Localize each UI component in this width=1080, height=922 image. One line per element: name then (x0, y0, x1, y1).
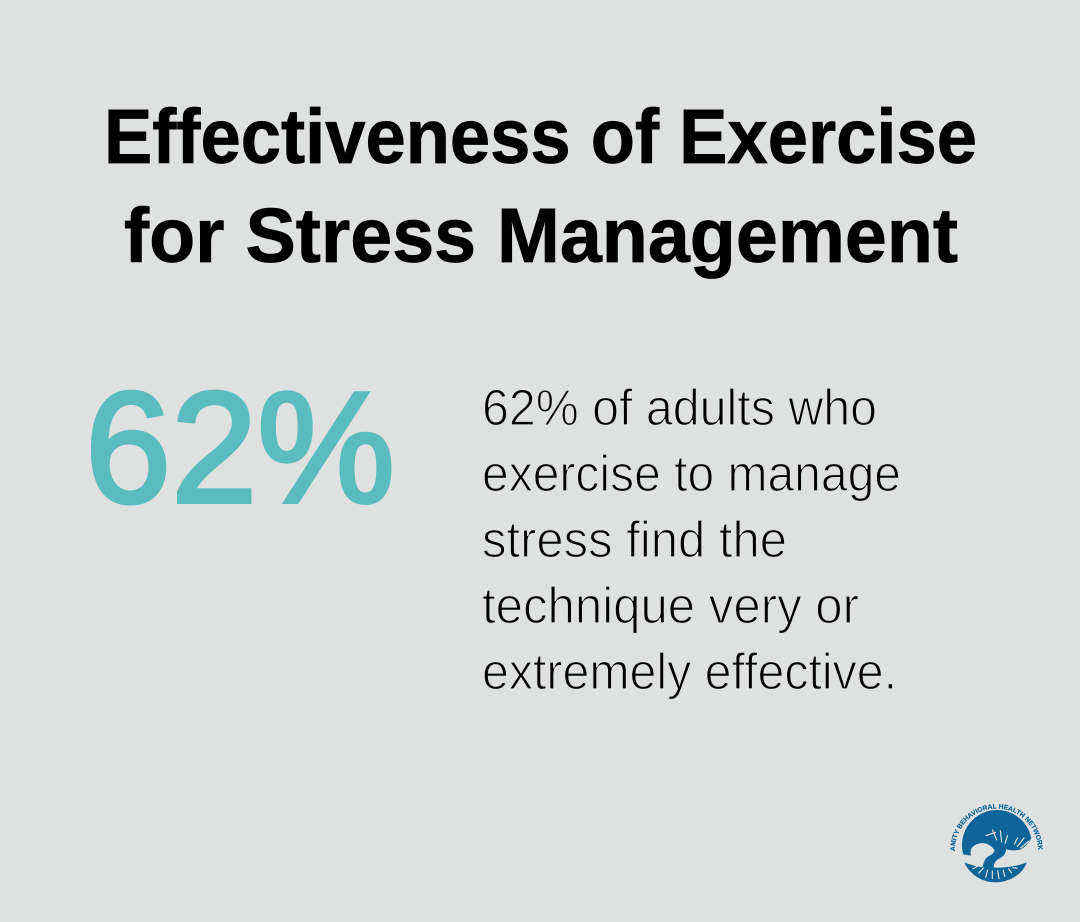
title (104, 94, 977, 279)
logo tree canopy (962, 810, 1032, 880)
description text: extremely effective. (482, 643, 897, 700)
title: for Stress Management (124, 193, 958, 279)
logo tree details (955, 830, 1038, 885)
description text: 62% of adults who (482, 379, 877, 436)
description text: exercise to manage (482, 445, 901, 502)
logo circular text: AMITY BEHAVIORAL HEALTH NETWORK (950, 804, 1043, 852)
big statistic: 62%: 62% (85, 360, 395, 536)
description text: technique very or (482, 577, 859, 634)
description text: stress find the (482, 511, 787, 568)
description text (482, 379, 901, 700)
title: Effectiveness of Exercise (104, 94, 977, 180)
icon: Amity Behavioral Health Network logo (950, 804, 1043, 882)
